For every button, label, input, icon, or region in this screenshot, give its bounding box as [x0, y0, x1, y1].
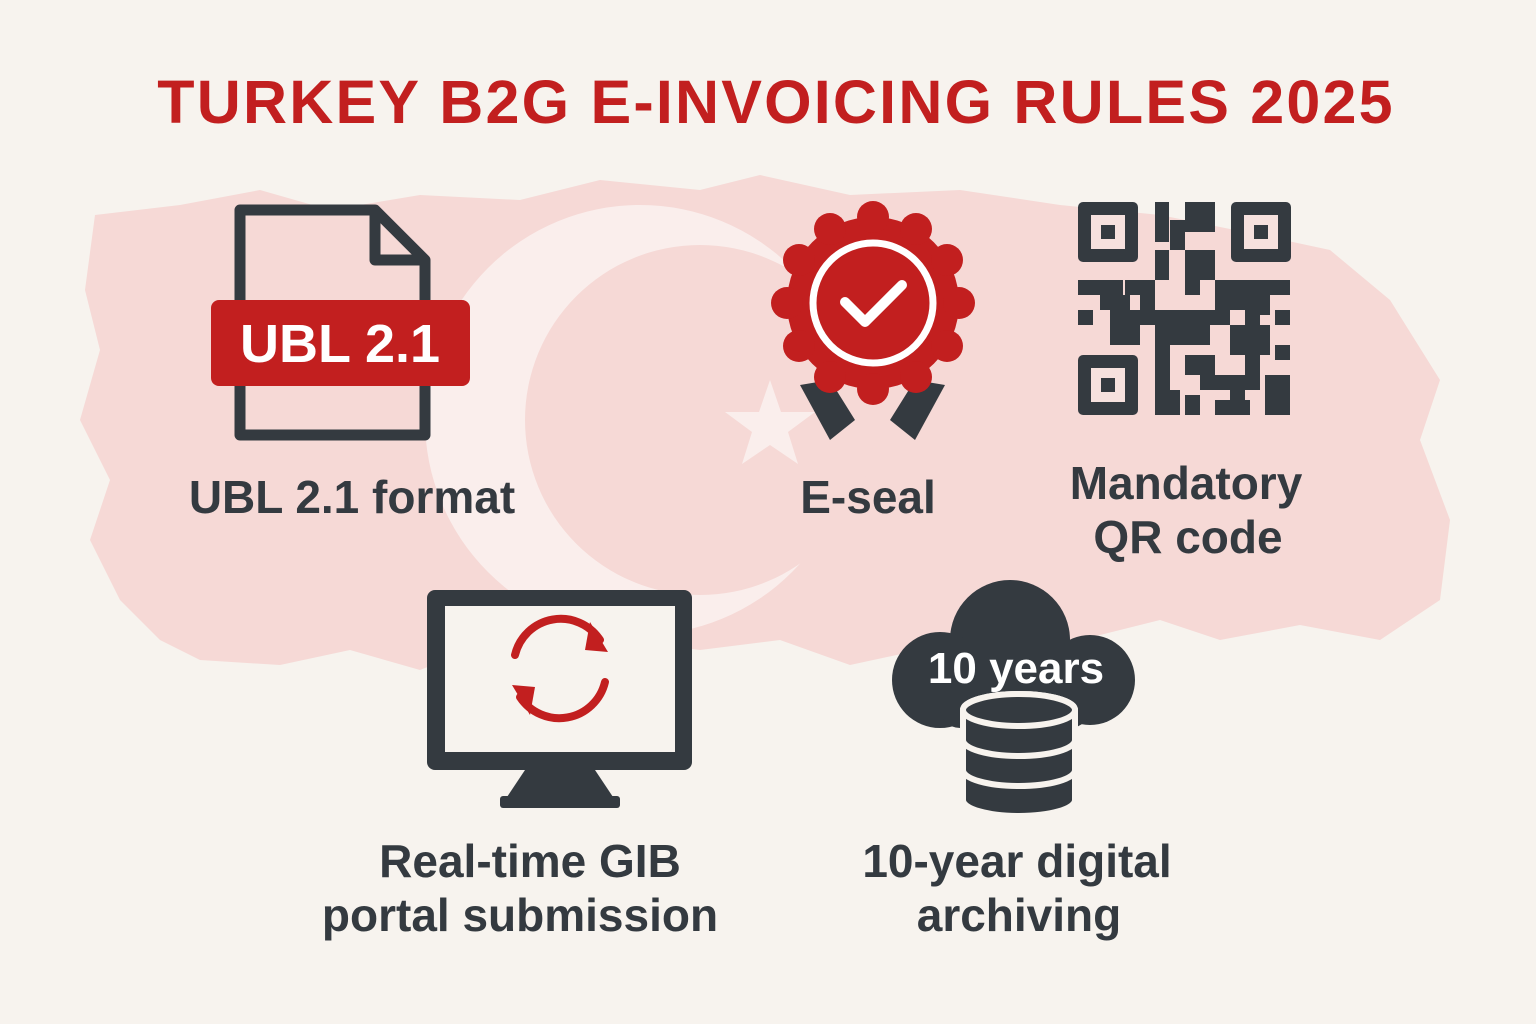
label: UBL 2.1 format: UBL 2.1 format: [189, 471, 515, 523]
label: E-seal: E-seal: [800, 471, 936, 523]
icon: cloud with database: 10 years: [928, 644, 1104, 693]
icon: monitor with sync: [427, 590, 692, 808]
icon: QR code: [1078, 202, 1291, 415]
label: Mandatory QR code: Mandatory: [1070, 457, 1303, 509]
text: portal submission: [322, 889, 718, 941]
icon: UBL document: UBL 2.1: [240, 314, 440, 374]
text: archiving: [917, 889, 1121, 941]
title: TURKEY B2G E-INVOICING RULES 2025: [157, 68, 1395, 136]
label: 10-year digital archiving: 10-year digital: [862, 835, 1172, 887]
background map of Turkey with flag: [80, 175, 1450, 670]
icon: cloud with database: [892, 580, 1135, 816]
label: Real-time GIB portal submission: Real-time GIB: [379, 835, 681, 887]
icon: e-seal: [771, 201, 975, 440]
text: QR code: [1093, 511, 1283, 563]
icon: UBL document: [211, 210, 470, 435]
